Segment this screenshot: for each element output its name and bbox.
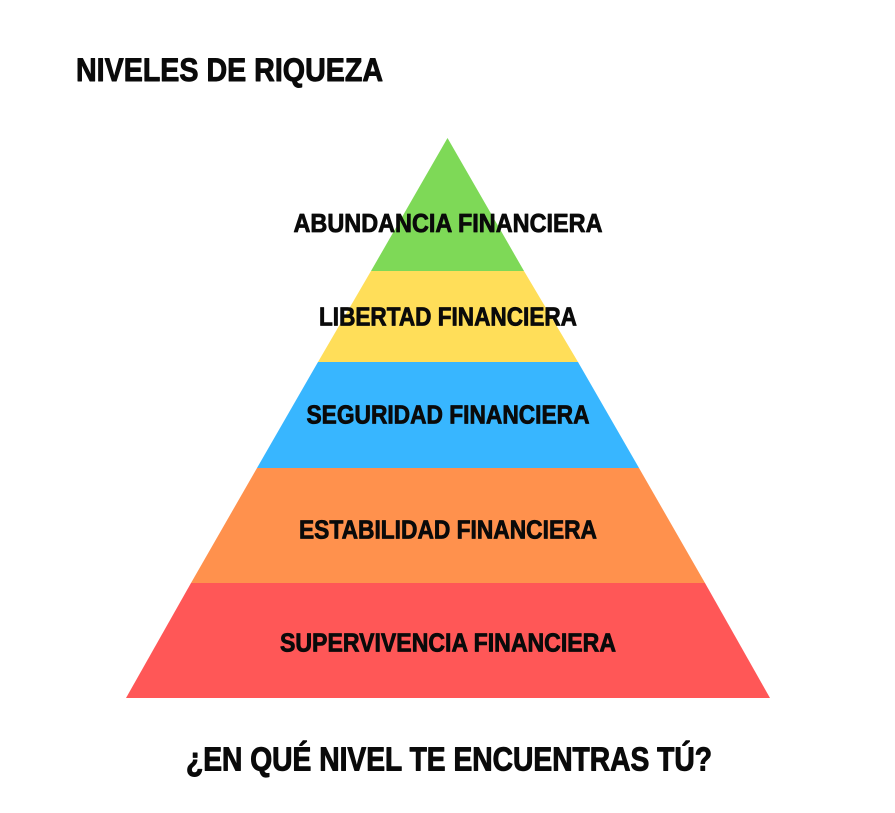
level: supervivencia financiera: SUPERVIVENCIA FINANCIERA (280, 629, 616, 657)
level: estabilidad financiera: ESTABILIDAD FINANCIERA (299, 516, 597, 544)
level: supervivencia financiera (126, 583, 770, 698)
level: libertad financiera (318, 271, 578, 362)
level: abundancia financiera: ABUNDANCIA FINANCIERA (294, 210, 602, 238)
closing question: ¿EN QUÉ NIVEL TE ENCUENTRAS TÚ? (186, 741, 712, 778)
level: libertad financiera: LIBERTAD FINANCIERA (319, 303, 577, 331)
level: abundancia financiera (294, 138, 602, 271)
level: seguridad financiera (257, 362, 639, 468)
level: estabilidad financiera (191, 468, 705, 583)
pyramid chart (126, 138, 770, 698)
title: NIVELES DE RIQUEZA (76, 52, 383, 88)
level: seguridad financiera: SEGURIDAD FINANCIERA (306, 401, 590, 429)
